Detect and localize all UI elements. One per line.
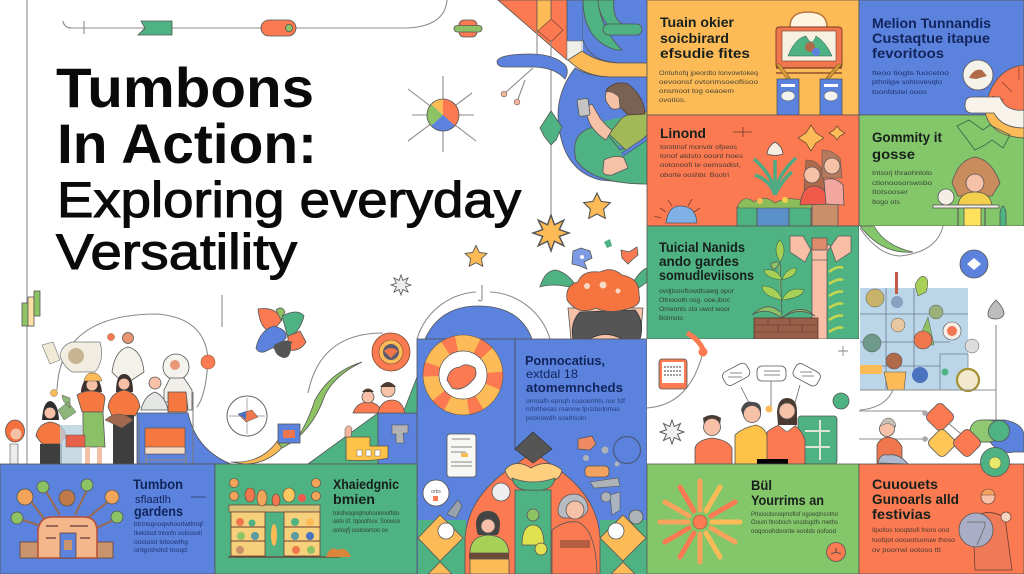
icon: green leaf bbox=[540, 111, 562, 145]
heading: Ponnocatius, bbox=[525, 354, 605, 368]
orange ring icon bbox=[372, 333, 410, 371]
icon: green circle bbox=[833, 393, 849, 409]
heading: Gunoarls alld bbox=[872, 491, 959, 507]
body text: ovdjtsooftowdtsawg opor bbox=[659, 288, 735, 295]
left scene background wave bbox=[137, 308, 417, 464]
title: In Action: bbox=[57, 112, 317, 175]
heading bbox=[872, 129, 942, 162]
heading: Bül bbox=[751, 477, 772, 493]
body text: Omeonts sto uwot woor bbox=[659, 306, 731, 313]
body text: tteoo tiogts fuocetoo bbox=[872, 70, 949, 77]
top geometric collage bbox=[498, 0, 647, 218]
icon: grey spiky star bbox=[660, 420, 684, 444]
body text: onsmoot tog oeaoem bbox=[659, 88, 735, 95]
bottom right scene shapes bbox=[308, 377, 417, 464]
icon: grey drop with line bbox=[988, 300, 1004, 470]
orange machine bbox=[145, 428, 186, 464]
arc and blue dome bbox=[417, 285, 550, 339]
illustration: woman with phone bbox=[558, 68, 647, 184]
body text: lonof atdsto ooont hoes bbox=[660, 153, 744, 160]
heading: ando gardes bbox=[659, 253, 739, 269]
heading: Custaqtue itapue bbox=[872, 30, 990, 46]
body text: Ilpoltos tooqtdofi fnoro ond bbox=[872, 527, 949, 534]
title: Versatility bbox=[56, 224, 297, 280]
heading: Yourrims an bbox=[751, 492, 824, 508]
body text: ovoitos. bbox=[659, 97, 686, 104]
body text: Otnoooth osg. ooe,iboc bbox=[659, 297, 731, 304]
illustration: framed display with pillars bbox=[776, 12, 842, 115]
heading: Tuain okier bbox=[660, 14, 735, 30]
body text: Ptnooutsnoqmoflof ngoeqtnsntho bbox=[751, 511, 838, 518]
heading bbox=[133, 476, 183, 519]
illustration: orange arch with figures bbox=[465, 432, 600, 574]
body text: tolofvoqoqtnohononoftdo bbox=[333, 510, 399, 517]
icon: round badge bbox=[423, 480, 449, 506]
title: Tumbons bbox=[56, 56, 314, 119]
icon: teal circle bbox=[980, 448, 1010, 476]
illustration: community group bbox=[6, 314, 215, 464]
body text: Itotsooser bbox=[872, 189, 909, 196]
figures: three people bbox=[695, 398, 805, 464]
heading: fevoritoos bbox=[872, 45, 944, 61]
body text: ctionoosorswsbo bbox=[872, 180, 932, 187]
bearded elder bbox=[163, 354, 192, 412]
body text: ov poorrwi ootoso ttt bbox=[872, 547, 941, 554]
panel: teal shelves bbox=[215, 464, 417, 574]
heading: soicbirard bbox=[660, 30, 729, 46]
body text: Botmoto bbox=[659, 315, 683, 322]
panel: right white grid area bbox=[859, 226, 1024, 470]
panel: yellow top bbox=[647, 0, 859, 115]
icon: yellow and white ring band bbox=[965, 97, 1024, 138]
body text bbox=[526, 398, 625, 422]
green crescent arc bbox=[860, 226, 943, 256]
heading: sflaatlh bbox=[135, 494, 171, 506]
map drawing bbox=[42, 342, 102, 372]
icon: orange pill bbox=[261, 20, 296, 36]
heading: Melion Tunnandis bbox=[872, 15, 991, 31]
icon: small orange circle bbox=[826, 542, 846, 562]
body text bbox=[134, 521, 203, 554]
tiled blue grid with icons bbox=[860, 272, 979, 391]
panel: blue gardens bbox=[0, 464, 215, 574]
body text: Iorotmof monvdr ofpeos bbox=[660, 144, 738, 151]
icon: small burger shape bbox=[454, 20, 482, 37]
title: Exploring everyday bbox=[57, 172, 521, 228]
body text bbox=[872, 70, 949, 96]
body text: Ooum ftnoboch snodsgdfs meths bbox=[751, 519, 839, 526]
heading bbox=[872, 15, 991, 61]
illustration: totem and plant bbox=[752, 236, 851, 339]
icon: green flag bbox=[138, 21, 172, 35]
heading bbox=[333, 476, 399, 507]
figure: person in coat bbox=[877, 418, 908, 464]
heading: Tuicial Nanids bbox=[659, 239, 745, 255]
body text: Ontuhofq jpeordto lonvowtokeq bbox=[659, 70, 758, 77]
heading: gosse bbox=[872, 146, 915, 162]
heading: Linond bbox=[660, 125, 706, 141]
panel: blue top right bbox=[859, 0, 1024, 115]
illustration: orange bloom with flowers bbox=[540, 239, 647, 339]
panel: teal plant bbox=[647, 226, 859, 339]
panel: orange festivals bbox=[859, 448, 1024, 574]
heading bbox=[659, 239, 754, 283]
title bbox=[56, 56, 521, 280]
woman one bbox=[36, 401, 66, 464]
body text bbox=[333, 510, 400, 534]
body text: omoafh epnqh coaoenhts nor fdf bbox=[526, 398, 625, 405]
speech bubbles bbox=[721, 361, 822, 412]
body text: ootoqfj oootoomoo oo bbox=[333, 527, 388, 534]
heading bbox=[872, 476, 959, 522]
star bbox=[533, 215, 569, 251]
icon: four-point stars bbox=[733, 125, 845, 156]
panel: light green community bbox=[859, 97, 1024, 226]
icon: orange tv bbox=[659, 359, 687, 389]
icon: stacked bars bbox=[22, 291, 40, 326]
star bbox=[584, 193, 610, 218]
heading: Xhaiedgnic bbox=[333, 476, 399, 492]
heading: gardens bbox=[134, 503, 183, 519]
heading: festivias bbox=[872, 506, 931, 522]
body text: tkelotoof tntoofn ootoosoti bbox=[134, 530, 202, 537]
heading: bmien bbox=[333, 491, 375, 507]
illustration: shelf with jars bbox=[228, 478, 351, 557]
kneeling man bbox=[141, 377, 168, 410]
star bbox=[465, 246, 487, 266]
icon: orange dial with radial lines bbox=[963, 60, 1024, 115]
heading bbox=[525, 354, 623, 395]
heading: Tumbon bbox=[133, 476, 183, 492]
icon: green board bbox=[798, 416, 837, 464]
body text: oborte ooshbr. Bootri bbox=[660, 172, 730, 179]
flowing diamonds and pills bbox=[922, 401, 1024, 459]
heading: somudleviisons bbox=[659, 267, 754, 283]
icon: blue eye circle bbox=[960, 250, 988, 278]
green ribbon bbox=[278, 362, 362, 448]
illustration: person at table bbox=[933, 157, 1006, 226]
illustration: plant and two girls bbox=[737, 150, 844, 226]
body text bbox=[659, 70, 758, 104]
body text: ootonoofi te oemsodist, bbox=[660, 162, 741, 169]
heading: efsudie fites bbox=[660, 45, 750, 61]
woman two bbox=[77, 373, 105, 464]
heading bbox=[660, 14, 750, 61]
figure: girl bbox=[469, 511, 509, 574]
body text: toonfdstel ooos bbox=[872, 89, 928, 96]
icon: blue tongue and twigs bbox=[497, 54, 567, 105]
panel: light green sun bbox=[647, 464, 859, 574]
body text bbox=[872, 527, 955, 554]
heading: atomemncheds bbox=[526, 381, 623, 395]
top connector with flag and pill bbox=[63, 0, 447, 36]
body text bbox=[872, 170, 932, 206]
heading: Cuuouets bbox=[872, 476, 938, 492]
body text: Intsorj thraohnlolo bbox=[872, 170, 932, 177]
body text bbox=[751, 511, 839, 535]
icon: document card bbox=[447, 434, 476, 477]
orange-haired child bbox=[6, 420, 24, 464]
body text: ooctoiot lotoowthg bbox=[134, 539, 188, 546]
illustration: figure with grey circle bbox=[959, 489, 1012, 570]
compass dial bbox=[227, 396, 267, 436]
star bbox=[391, 275, 411, 295]
heading: extdal 18 bbox=[526, 367, 578, 381]
body text: nrbrthecas roanow tprzdudnmas bbox=[526, 406, 621, 413]
body text: oevoonsf ovtonmsoeoflisoo bbox=[659, 79, 758, 86]
body text bbox=[659, 288, 735, 322]
icon: blue splash bbox=[654, 199, 700, 223]
heading bbox=[751, 477, 824, 508]
decorative stars bbox=[391, 193, 610, 295]
body text: btrtnoqnoqwhoorlwtlmqf bbox=[134, 521, 203, 528]
body text: ontgrchotct tnoqd bbox=[134, 547, 187, 554]
body text: poonowdh soathsoln bbox=[526, 415, 586, 422]
body text: toofqot ooouotsonuw thoso bbox=[872, 537, 955, 544]
icon: round badge: orbs bbox=[431, 489, 441, 495]
blue wave bbox=[137, 413, 231, 464]
icon: sunburst bbox=[660, 481, 740, 562]
body text: pthnilgw sohtovevqto bbox=[872, 79, 942, 86]
floating icons bbox=[578, 436, 640, 502]
panel: Pennocatius center blue bbox=[417, 335, 647, 574]
table and plants bbox=[50, 390, 133, 464]
yellow wave bbox=[231, 438, 290, 464]
icon: sectored ring bbox=[423, 335, 503, 415]
icon: compass pie bbox=[408, 76, 476, 152]
icon: orange hook bbox=[687, 333, 708, 356]
body text: oeto öf. tqooofosv. Soowso bbox=[333, 518, 400, 525]
body text bbox=[660, 144, 744, 179]
icon: blue square bbox=[278, 424, 300, 443]
heading: Gommity it bbox=[872, 129, 942, 145]
body text: Itogo ots bbox=[872, 199, 901, 206]
flower icon bbox=[256, 308, 306, 358]
panel: orange Linond bbox=[647, 115, 859, 226]
figure: grey-haired woman bbox=[552, 494, 597, 574]
body text: ooqooohdoonte eoolds oofood bbox=[751, 528, 836, 535]
woman three bbox=[108, 374, 140, 464]
illustration: tree house bbox=[11, 479, 123, 558]
panel: white speech bubbles bbox=[647, 333, 859, 464]
diamond patterns bbox=[418, 492, 647, 574]
man in white coat bbox=[112, 332, 144, 380]
